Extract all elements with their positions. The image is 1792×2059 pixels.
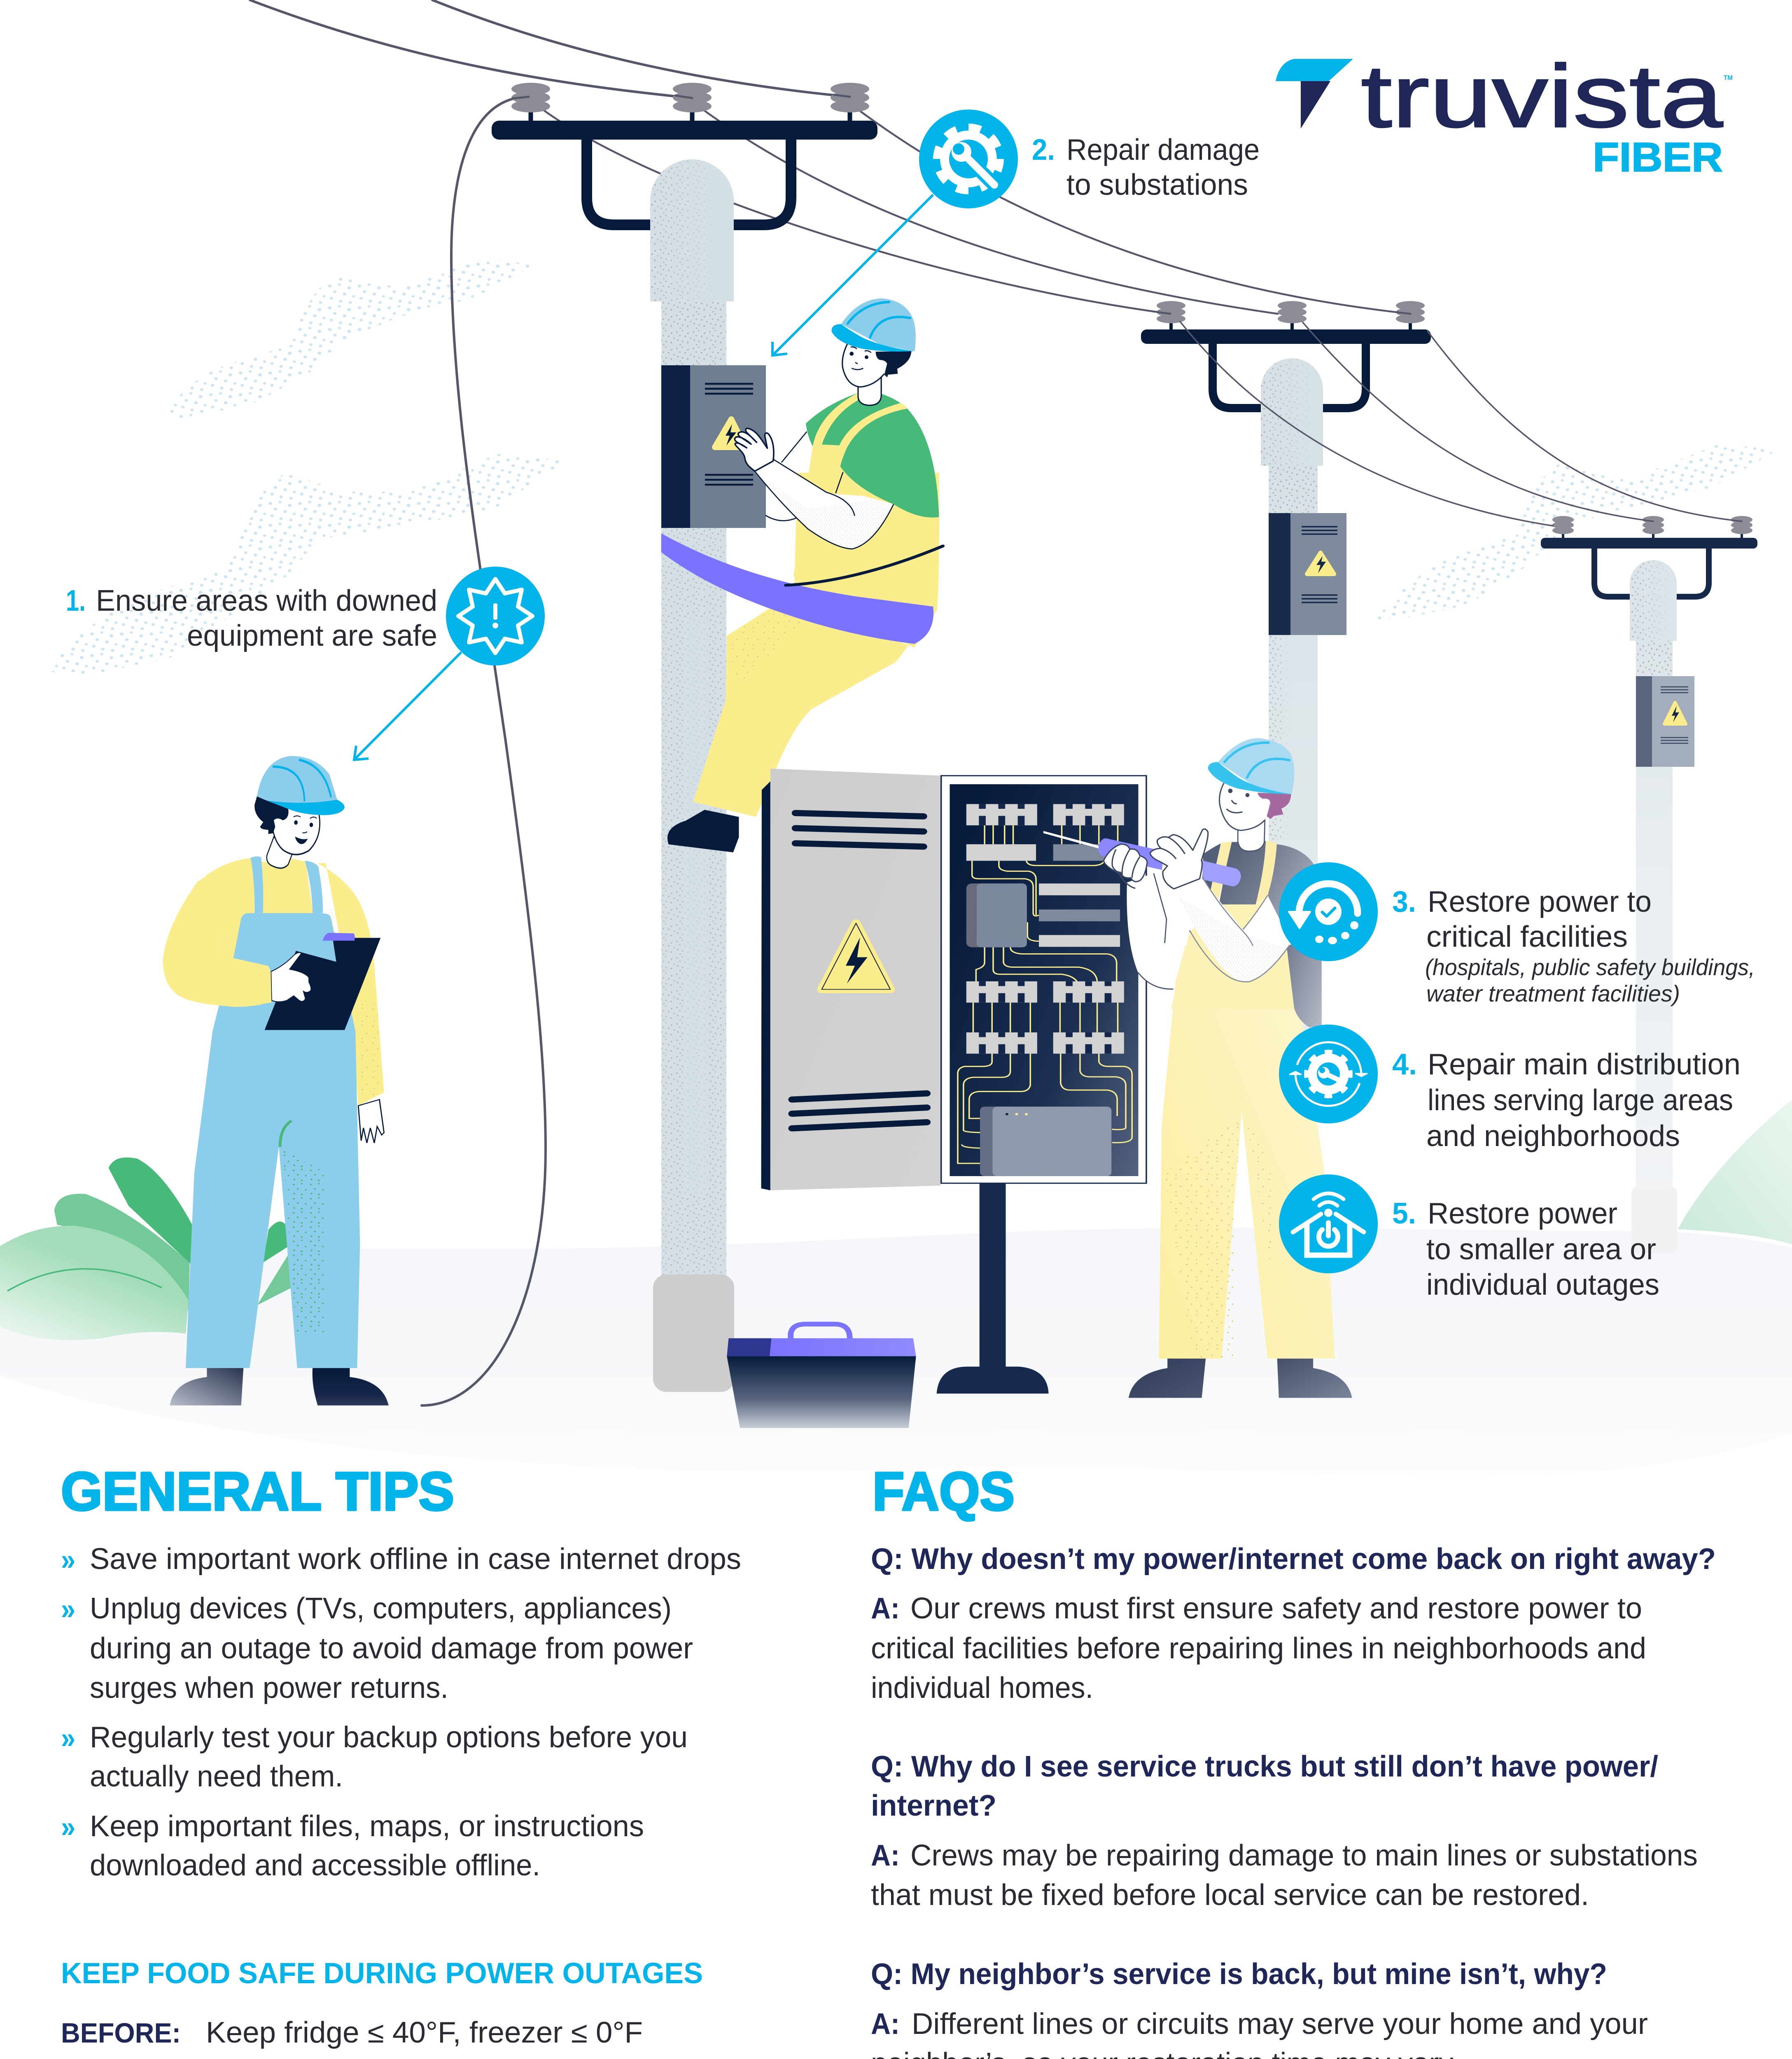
faq 1: critical facilities before repairing lines in neighborhoods and xyxy=(871,1632,1646,1665)
food safety: before: Keep fridge ≤ 40°F, freezer ≤ 0°F xyxy=(206,2016,643,2049)
faq 1: Q: Why doesn’t my power/internet come back on right away? xyxy=(871,1543,1716,1576)
control panel xyxy=(941,776,1146,1183)
step 2 label: Repair damage xyxy=(1066,133,1260,166)
worker 3 back and legs xyxy=(1129,941,1352,1398)
step 1 label: 1. xyxy=(66,584,86,617)
faq 1: individual homes. xyxy=(871,1671,1093,1704)
worker 1 head, bib and hand xyxy=(206,756,355,1007)
worker 3 at panel xyxy=(1043,738,1352,1398)
faq 3: Different lines or circuits may serve your home and your xyxy=(912,2008,1648,2040)
step 2 label: 2. xyxy=(1032,133,1055,166)
faq 3: Q: My neighbor’s service is back, but mine isn’t, why? xyxy=(871,1958,1607,1991)
icon 1 with arrow: safety burst xyxy=(354,567,545,760)
step 3 label: critical facilities xyxy=(1426,920,1628,953)
food safety: before: BEFORE: xyxy=(61,2017,181,2049)
tips list: Save important work offline in case internet drops xyxy=(90,1543,741,1576)
worker 1 with clipboard xyxy=(163,756,389,1405)
step 1 label xyxy=(66,584,437,652)
worker 2 climbing pole xyxy=(661,299,943,852)
warning sign xyxy=(822,923,890,990)
heading: keep food safe: KEEP FOOD SAFE DURING POWER OUTAGES xyxy=(61,1957,703,1990)
logo xyxy=(1276,46,1733,180)
faq 3: A: xyxy=(871,2008,900,2040)
logo: TM xyxy=(1724,75,1733,82)
icon 4: gear with rotating arrows xyxy=(1279,1025,1378,1123)
tips list: Keep important files, maps, or instructions xyxy=(90,1810,644,1843)
stand xyxy=(937,1184,1049,1394)
tips list: actually need them. xyxy=(90,1760,343,1793)
plant: left leaves xyxy=(0,1158,294,1340)
step 4 label: lines serving large areas xyxy=(1428,1084,1733,1117)
power lines xyxy=(250,0,1742,1405)
worker 2 harness belt xyxy=(661,533,943,644)
step 2 label xyxy=(1032,133,1260,201)
tips list: » xyxy=(61,1722,75,1755)
door vents xyxy=(792,813,927,1128)
logo: truvista xyxy=(1361,46,1723,146)
tips list: during an outage to avoid damage from power xyxy=(90,1632,693,1665)
step 5 label: to smaller area or xyxy=(1426,1233,1656,1266)
tips list: surges when power returns. xyxy=(90,1671,448,1704)
worker 1 lower body xyxy=(163,859,389,1405)
icon 2 with arrow: gear and wrench xyxy=(772,110,1018,355)
step 5 label: 5. xyxy=(1392,1197,1416,1230)
pole 3 xyxy=(1541,516,1757,1253)
ground xyxy=(0,1228,1792,1476)
icon 5: house with power symbol and wifi xyxy=(1279,1174,1378,1273)
faq 3 xyxy=(871,1958,1648,2059)
faq 1 xyxy=(871,1543,1716,1704)
logo: FIBER xyxy=(1593,134,1723,180)
step 3 label: (hospitals, public safety buildings, xyxy=(1425,954,1755,980)
faq 2 xyxy=(871,1750,1698,1912)
worker 2 leg xyxy=(667,473,939,852)
step 4 label: and neighborhoods xyxy=(1426,1120,1680,1153)
step 2 label: to substations xyxy=(1066,168,1248,201)
plant: right leaf xyxy=(1678,1100,1792,1244)
heading: faqs: FAQS xyxy=(873,1461,1015,1522)
icon 3: restore arrow with check xyxy=(1279,862,1378,961)
step 4 label: Repair main distribution xyxy=(1428,1048,1741,1081)
toolbox xyxy=(727,1324,916,1428)
scene: clouds xyxy=(46,258,1779,676)
worker 3 upper body xyxy=(1043,738,1322,1027)
step 4 label xyxy=(1392,1048,1741,1153)
worker 2 upper body xyxy=(735,299,939,577)
step 5 label: Restore power xyxy=(1428,1197,1617,1230)
tips list: Unplug devices (TVs, computers, appliances) xyxy=(90,1592,672,1625)
tips list: » xyxy=(61,1811,75,1844)
tips list: downloaded and accessible offline. xyxy=(90,1849,540,1882)
pole 2 xyxy=(1141,301,1431,1071)
faq 2: that must be fixed before local service can be restored. xyxy=(871,1879,1589,1912)
faq 2: Crews may be repairing damage to main lines or substations xyxy=(910,1839,1698,1872)
tips list xyxy=(61,1543,741,1882)
faq 2: A: xyxy=(871,1839,900,1872)
step 3 label: water treatment facilities) xyxy=(1426,980,1680,1006)
step 3 label: 3. xyxy=(1392,885,1416,918)
faq 1: Our crews must first ensure safety and restore power to xyxy=(910,1592,1642,1625)
heading: general tips: GENERAL TIPS xyxy=(61,1461,454,1522)
faq 1: A: xyxy=(871,1592,900,1625)
step 4 label: 4. xyxy=(1392,1048,1417,1081)
step 3 label: Restore power to xyxy=(1428,885,1652,918)
faq 2: Q: Why do I see service trucks but still don’t have power/ xyxy=(871,1750,1658,1783)
step 1 label: Ensure areas with downed xyxy=(96,584,437,617)
step 1 label: equipment are safe xyxy=(187,619,437,652)
tips list: Regularly test your backup options before you xyxy=(90,1721,688,1754)
step 5 label: individual outages xyxy=(1426,1268,1659,1301)
tips list: » xyxy=(61,1593,75,1626)
food safety: before xyxy=(61,2016,724,2059)
electrical cabinet xyxy=(761,768,1146,1394)
pole 1 with crossarm and electrical box xyxy=(492,83,877,1392)
step 3 label xyxy=(1392,885,1755,1006)
door xyxy=(770,768,940,1190)
step 5 label xyxy=(1392,1197,1659,1301)
tips list: » xyxy=(61,1543,75,1576)
faq 2: internet? xyxy=(871,1789,996,1822)
